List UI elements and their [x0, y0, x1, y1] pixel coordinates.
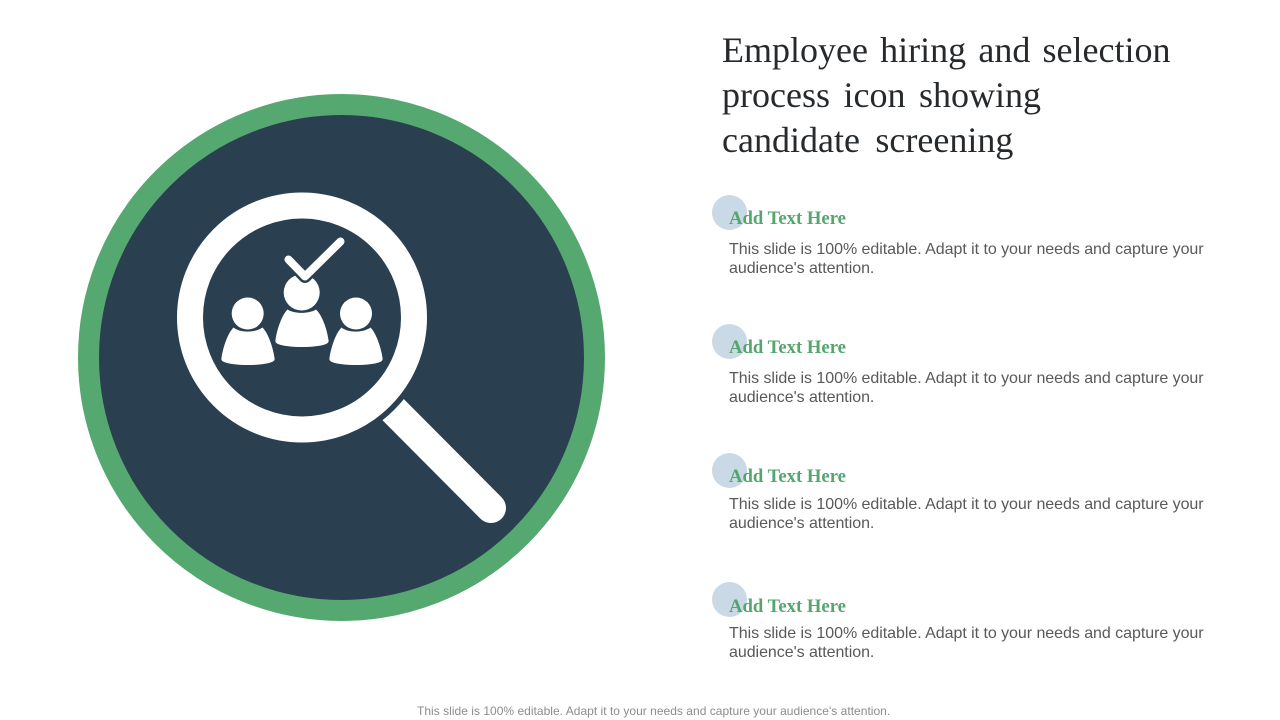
- title: process icon showing: [722, 75, 1041, 115]
- item 4: This slide is 100% editable. Adapt it to your needs and capture your: [729, 625, 1204, 642]
- title: [722, 30, 1170, 160]
- footer note: This slide is 100% editable. Adapt it to your needs and capture your audience's attention.: [417, 704, 890, 718]
- item 2: audience's attention.: [729, 389, 874, 406]
- title: Employee hiring and selection: [722, 30, 1170, 70]
- item 3: This slide is 100% editable. Adapt it to your needs and capture your: [729, 496, 1204, 513]
- item 4: Add Text Here: [729, 596, 846, 617]
- item 4: [712, 582, 1204, 661]
- item 3: Add Text Here: [729, 466, 846, 487]
- item 3: audience's attention.: [729, 515, 874, 532]
- item 1: This slide is 100% editable. Adapt it to your needs and capture your: [729, 241, 1204, 258]
- item 2: Add Text Here: [729, 337, 846, 358]
- check mark: [288, 242, 340, 276]
- outer green ring and navy disc: [88, 104, 594, 610]
- item 3: [712, 453, 1204, 532]
- item 2: This slide is 100% editable. Adapt it to your needs and capture your: [729, 370, 1204, 387]
- icon: magnifying glass screening candidates: [78, 94, 605, 621]
- magnifier handle: [385, 402, 491, 508]
- title: candidate screening: [722, 120, 1013, 160]
- item 1: Add Text Here: [729, 208, 846, 229]
- magnifier lens: [190, 206, 414, 430]
- item 2: [712, 324, 1204, 406]
- person center: [275, 274, 329, 347]
- handle gap: [174, 190, 430, 445]
- item 1: [712, 195, 1204, 277]
- item 1: audience's attention.: [729, 260, 874, 277]
- item 4: audience's attention.: [729, 644, 874, 661]
- person right: [329, 298, 383, 365]
- person left: [221, 298, 275, 365]
